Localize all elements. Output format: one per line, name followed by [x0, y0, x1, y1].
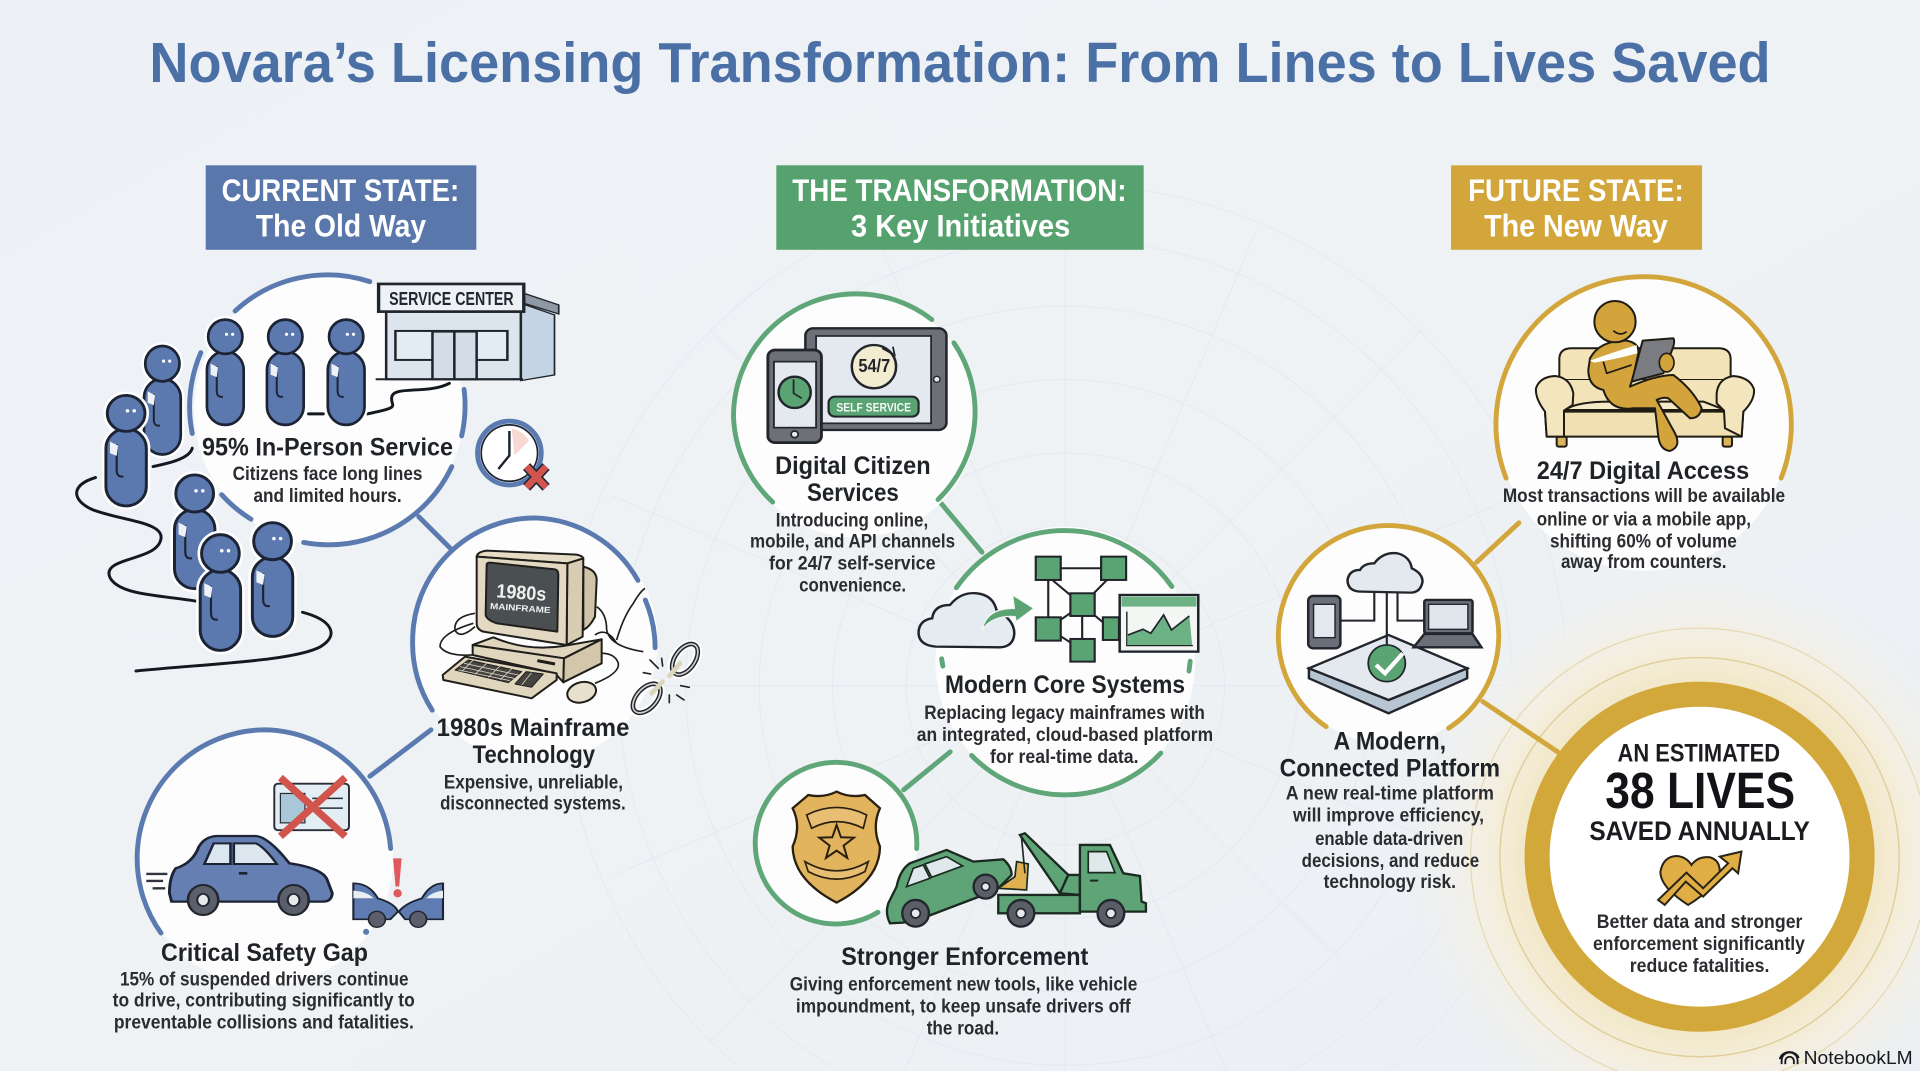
- icon: police badge: [793, 792, 880, 903]
- heading: 1980s Mainframe: [437, 714, 629, 742]
- column header: current state: [206, 165, 476, 250]
- icon: suspended license: [274, 778, 349, 836]
- circle outline: [733, 294, 975, 502]
- icon: phone and tablet: SELF SERVICE: [836, 400, 911, 414]
- body text: enforcement significantly: [1593, 934, 1805, 955]
- heading: [1280, 727, 1500, 782]
- connector: mainframe to safety gap: [370, 730, 431, 776]
- body text: mobile, and API channels: [750, 531, 955, 552]
- body text: Better data and stronger: [1597, 912, 1803, 933]
- connector: digital access to platform: [1477, 523, 1519, 562]
- icon: collision with exclamation: [353, 858, 443, 927]
- body text: Giving enforcement new tools, like vehicle: [790, 975, 1137, 996]
- icon: queue of people: [106, 320, 365, 650]
- circle outline: [413, 518, 655, 710]
- body text: disconnected systems.: [440, 793, 626, 814]
- circle outline: [1496, 277, 1791, 478]
- connector: digital to core systems: [938, 500, 982, 552]
- body text: shifting 60% of volume: [1550, 531, 1737, 552]
- column header: transformation: [776, 165, 1144, 250]
- connector: platform to lives saved: [1483, 702, 1558, 752]
- body text: [113, 970, 415, 1034]
- body text: for real-time data.: [990, 747, 1139, 768]
- heading: Critical Safety Gap: [161, 939, 368, 967]
- column header: future state: [1451, 165, 1702, 250]
- body text: convenience.: [799, 575, 906, 596]
- queue path line: [77, 383, 449, 671]
- circle outline: [190, 275, 465, 545]
- column header: current state: The Old Way: [256, 207, 426, 243]
- body text: and limited hours.: [253, 486, 402, 507]
- heading: Connected Platform: [1280, 754, 1500, 782]
- panel: stronger enforcement: [755, 762, 1146, 1040]
- panel: in-person service: [77, 275, 559, 671]
- icon: mainframe computer: MAINFRAME: [490, 601, 551, 615]
- icon: cloud platform with devices: [1308, 553, 1481, 713]
- column header: current state: CURRENT STATE:: [222, 172, 459, 208]
- icon: clock with red x: [478, 421, 546, 487]
- icon: person on couch with tablet: [1536, 301, 1754, 451]
- title: Novara’s Licensing Transformation: From Lines to Lives Saved: [149, 31, 1771, 94]
- heading: 95% In-Person Service: [202, 434, 453, 462]
- body text: will improve efficiency,: [1292, 806, 1484, 827]
- column header: transformation: 3 Key Initiatives: [851, 207, 1070, 243]
- body text: for 24/7 self-service: [769, 553, 936, 574]
- body text: Citizens face long lines: [233, 464, 422, 485]
- icon: tow truck with car: [887, 833, 1146, 927]
- body text: A new real-time platform: [1286, 784, 1494, 805]
- icon: service center building: [376, 284, 559, 381]
- panel: critical safety gap: [113, 730, 443, 1034]
- icon: mainframe computer: 1980s: [496, 581, 547, 606]
- body text: [1503, 486, 1785, 573]
- body text: 15% of suspended drivers continue: [120, 970, 408, 991]
- body text: online or via a mobile app,: [1537, 509, 1751, 530]
- gold ring: [1537, 694, 1862, 1019]
- column header: future state: The New Way: [1484, 207, 1668, 243]
- panel: 1980s mainframe: [413, 518, 703, 814]
- body text: [1286, 784, 1494, 893]
- heading: Technology: [473, 741, 595, 769]
- panel: lives saved callout: [1537, 694, 1862, 1019]
- body text: decisions, and reduce: [1302, 851, 1479, 872]
- body text: Replacing legacy mainframes with: [924, 703, 1205, 724]
- heading: [437, 714, 629, 769]
- heading: A Modern,: [1333, 727, 1446, 755]
- connector: core systems to enforcement: [904, 752, 950, 790]
- icon: phone and tablet: [768, 328, 946, 443]
- icon: service center building: SERVICE CENTER: [389, 288, 514, 309]
- body text: to drive, contributing significantly to: [113, 991, 415, 1012]
- body text: [440, 773, 626, 814]
- panel: modern connected platform: [1278, 526, 1500, 893]
- body text: away from counters.: [1561, 552, 1727, 573]
- circle outline: [1278, 526, 1499, 728]
- column header: future state: FUTURE STATE:: [1468, 172, 1684, 208]
- headline stat: AN ESTIMATED: [1618, 740, 1780, 768]
- headline stat: SAVED ANNUALLY: [1589, 816, 1810, 846]
- body text: technology risk.: [1324, 872, 1456, 893]
- icon: phone and tablet: 54/7: [858, 355, 890, 376]
- heading: Services: [807, 479, 899, 507]
- body text: an integrated, cloud-based platform: [917, 725, 1213, 746]
- panel: 24/7 digital access: [1496, 277, 1791, 573]
- icon: speeding car: [146, 836, 332, 915]
- icon: mainframe computer: [440, 551, 645, 706]
- headline stat: 38 LIVES: [1605, 761, 1795, 819]
- panel: modern core systems: [917, 527, 1213, 796]
- panel: digital citizen services: [733, 294, 977, 596]
- body text: enable data-driven: [1315, 829, 1463, 850]
- body text: Expensive, unreliable,: [444, 773, 623, 794]
- icon: broken chain: [628, 639, 703, 718]
- heading: Modern Core Systems: [945, 671, 1185, 699]
- body text: reduce fatalities.: [1630, 956, 1769, 977]
- icon: heart with rising arrow: [1658, 852, 1741, 905]
- body text: impoundment, to keep unsafe drivers off: [796, 997, 1131, 1018]
- icon: cloud network and dashboard: [919, 557, 1198, 662]
- watermark: NotebookLM: NotebookLM: [1804, 1047, 1913, 1068]
- heading: 24/7 Digital Access: [1537, 457, 1749, 485]
- body text: preventable collisions and fatalities.: [114, 1013, 414, 1034]
- heading: [775, 452, 931, 507]
- glow behind lives saved: [1406, 563, 1920, 1071]
- body text: the road.: [927, 1019, 999, 1040]
- circle outline: [755, 762, 917, 924]
- column header: transformation: THE TRANSFORMATION:: [792, 172, 1127, 208]
- body text: [790, 975, 1137, 1040]
- circle outline: [137, 730, 391, 935]
- heading: Stronger Enforcement: [841, 943, 1089, 971]
- body text: Most transactions will be available: [1503, 486, 1785, 507]
- body text: [1593, 912, 1805, 977]
- body text: [233, 464, 422, 507]
- circle outline: [942, 531, 1190, 795]
- body text: Introducing online,: [776, 511, 928, 532]
- connector: in-person to mainframe: [419, 517, 452, 550]
- heading: Digital Citizen: [775, 452, 931, 480]
- body text: [750, 511, 955, 596]
- headline stat: [1589, 740, 1810, 846]
- body text: [917, 703, 1213, 768]
